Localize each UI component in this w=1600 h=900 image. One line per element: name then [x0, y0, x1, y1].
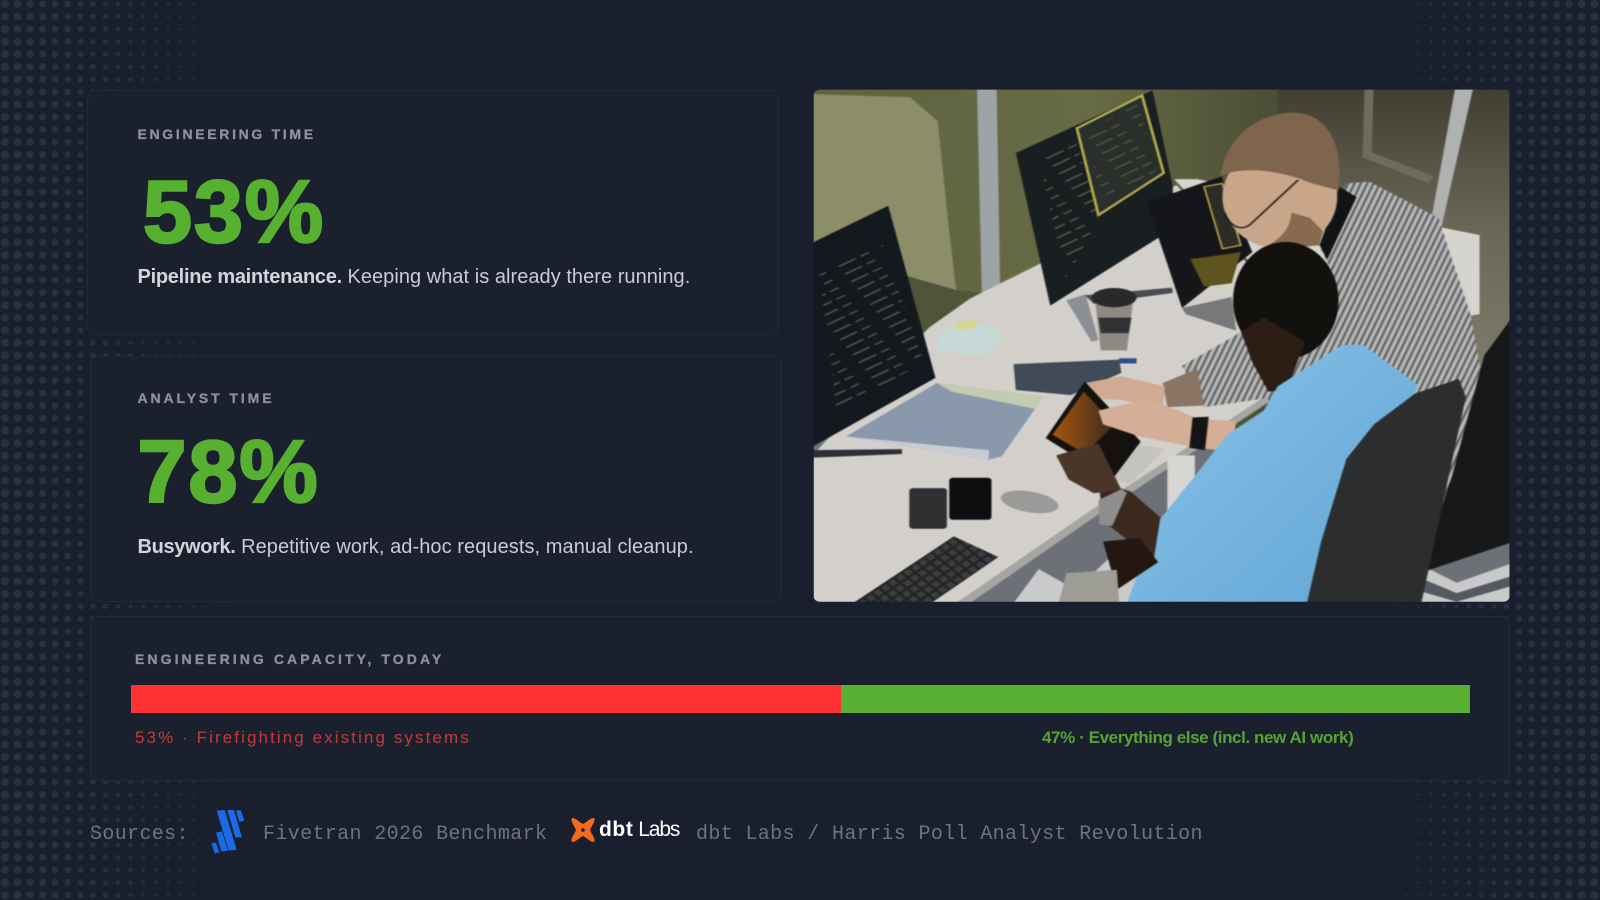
icon: dbt x mark	[572, 818, 594, 842]
room background	[814, 365, 1510, 602]
stat: 78%: 78%	[138, 422, 320, 521]
rug floor	[1014, 559, 1138, 602]
bar segment: 53% firefighting	[130, 685, 840, 713]
label: analyst time: ANALYST TIME	[138, 390, 274, 406]
legend: 47% everything else: 47% · Everything else (incl. new AI work)	[1042, 728, 1353, 747]
stat: 53%: 53%	[143, 162, 325, 261]
keyboard	[854, 536, 999, 602]
panel: analyst time	[90, 356, 782, 602]
description: busywork: Busywork. Repetitive work, ad-hoc requests, manual cleanup.	[138, 536, 694, 558]
mouse	[1000, 490, 1059, 514]
source: dbt labs: dbt Labs / Harris Poll Analyst Revolution	[696, 823, 1203, 846]
engineer in blue shirt	[1052, 242, 1418, 631]
photo: two engineers at a desk with code monitors	[814, 90, 1510, 602]
wordmark: dbt labs: dbt Labs	[599, 818, 679, 841]
description: pipeline maintenance: Pipeline maintenance. Keeping what is already there running.	[138, 266, 690, 288]
coffee cup	[1092, 288, 1137, 350]
sticky notes	[938, 319, 998, 356]
panel: engineering time	[87, 90, 779, 335]
engineer in striped shirt	[1086, 113, 1484, 532]
label: engineering time: ENGINEERING TIME	[138, 126, 316, 142]
icon: fivetran logo	[211, 810, 244, 854]
panel: engineering capacity today	[90, 616, 1510, 781]
hand with smartwatch	[1098, 399, 1236, 452]
tablet	[1046, 381, 1165, 484]
office chairs	[1306, 320, 1510, 602]
back laptop	[1147, 176, 1252, 308]
label: engineering capacity: ENGINEERING CAPACITY, TODAY	[135, 651, 444, 667]
dark folder	[1014, 360, 1121, 395]
icon: dbt labs logo	[572, 818, 680, 842]
legend: 53% firefighting: 53% · Firefighting existing systems	[135, 728, 471, 747]
bar segment: 47% everything else	[840, 685, 1470, 713]
sources label: Sources:	[90, 823, 189, 846]
stacked bar	[131, 685, 1470, 713]
left monitor	[814, 206, 936, 446]
source: fivetran: Fivetran 2026 Benchmark	[263, 823, 547, 846]
poles	[977, 80, 1000, 294]
desks	[1174, 179, 1480, 328]
binder	[846, 383, 1043, 460]
sources row	[90, 810, 1203, 854]
phones and power bank	[909, 478, 991, 529]
center monitor	[1016, 90, 1173, 306]
